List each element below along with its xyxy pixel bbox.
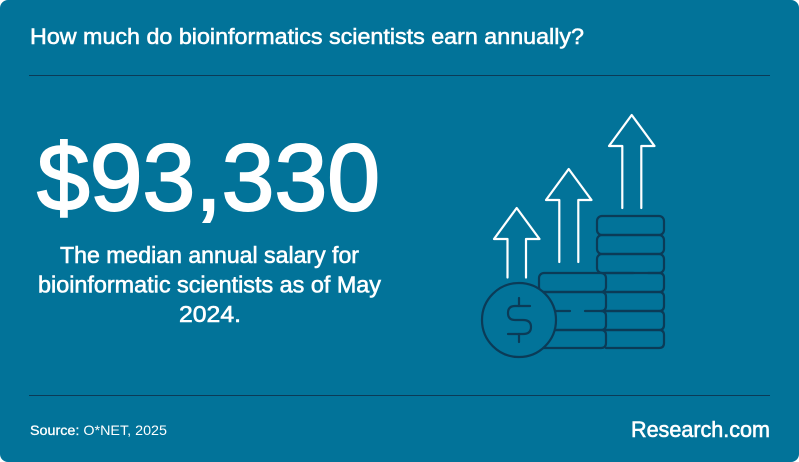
source note: Source: O*NET, 2025 — [30, 422, 167, 438]
text block: salary description: bioinformatic scientists as of May — [38, 272, 382, 298]
icon: middle coin stack — [539, 273, 606, 348]
arrow: left — [494, 208, 540, 278]
title: How much do bioinformatics scientists earn annually? — [30, 24, 584, 49]
text block: salary description: 2024. — [179, 301, 241, 327]
text block: salary description — [38, 242, 382, 327]
icon: right coin stack — [597, 216, 664, 348]
logo: Research.com: Research.com — [631, 417, 770, 442]
arrow: middle — [546, 169, 592, 262]
icon: dollar coin — [482, 283, 556, 357]
big number: salary: $93,330 — [37, 125, 380, 231]
text block: salary description: The median annual salary for — [60, 242, 359, 268]
arrow: right — [609, 115, 654, 208]
icon: coins with rising arrows — [482, 115, 664, 357]
